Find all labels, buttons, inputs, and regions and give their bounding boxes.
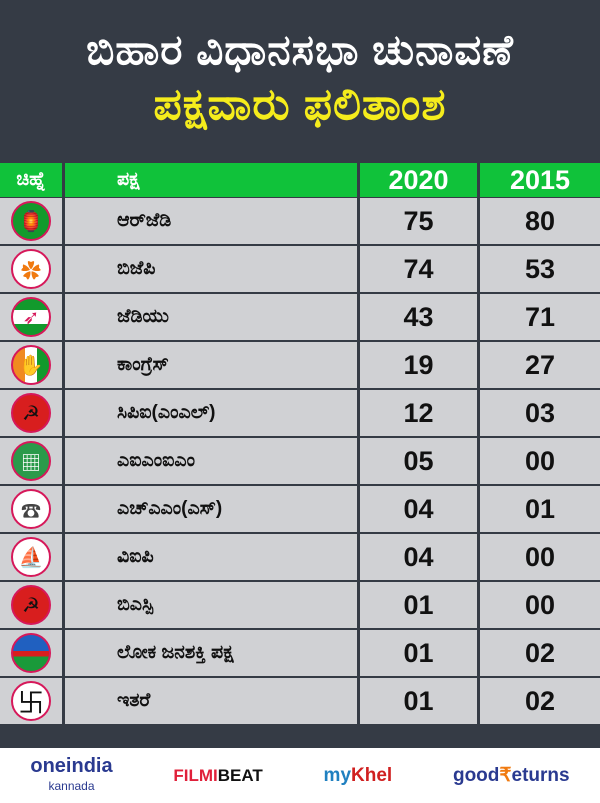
row: BJP: ಬಿಜೆಪಿ [117, 258, 155, 279]
row: BSP: ☭ [22, 594, 40, 616]
row: BJP [0, 246, 600, 292]
header: symbol: ಚಿಹ್ನೆ [16, 169, 46, 190]
logo: filmibeat: FILMIBEAT [173, 766, 263, 784]
row: JDU: ➶ [23, 306, 39, 328]
row: BSP: ಬಿಎಸ್ಪಿ [117, 594, 154, 615]
row: VIP: 00 [525, 542, 555, 572]
title: ಬಿಹಾರ ವಿಧಾನಸಭಾ ಚುನಾವಣೆ [86, 26, 514, 73]
row: Others [0, 678, 600, 724]
header: party [65, 163, 357, 197]
row: AIMIM: ▦ [21, 452, 41, 474]
row: HAM(S): 04 [403, 494, 434, 524]
row: RJD: 75 [403, 206, 434, 236]
row: JDU: ಜೆಡಿಯು [117, 306, 169, 327]
header: 2020 [360, 163, 477, 197]
row: LJP: 02 [525, 638, 555, 668]
row: Congress [0, 342, 600, 388]
row: CPI(ML): 12 [403, 398, 434, 428]
row: BSP: 01 [403, 590, 434, 620]
row: Others: ಇತರೆ [117, 690, 150, 711]
row: VIP: 04 [403, 542, 434, 572]
row: JDU: 71 [525, 302, 555, 332]
row: HAM(S): 01 [525, 494, 555, 524]
header: 2020: 2020 [388, 164, 449, 194]
row: Others: 02 [525, 686, 555, 716]
row: Congress: ಕಾಂಗ್ರೆಸ್ [117, 354, 169, 375]
row: RJD: 80 [525, 206, 555, 236]
subtitle: ಪಕ್ಷವಾರು ಫಲಿತಾಂಶ [153, 80, 446, 129]
row: AIMIM [0, 438, 600, 484]
logo: oneindia: oneindia [30, 754, 113, 776]
row: HAM(S): ☎ [21, 500, 41, 522]
logo: goodreturns: good₹eturns [453, 765, 570, 786]
logo: oneindia: kannada [48, 778, 95, 792]
row: VIP [0, 534, 600, 580]
logo: oneindia [30, 754, 113, 792]
row: Others: 卐 [18, 688, 44, 718]
row: Congress: 19 [403, 350, 434, 380]
row: HAM(S) [0, 486, 600, 532]
row: BJP: ✿ [21, 260, 41, 282]
footer logos [0, 748, 600, 803]
row: BSP: 00 [525, 590, 555, 620]
row: RJD: ಆರ್‌ಜೆಡಿ [117, 210, 171, 231]
row: LJP: ಲೋಕ ಜನಶಕ್ತಿ ಪಕ್ಷ [117, 642, 234, 663]
row: Congress: ✋ [19, 354, 43, 376]
table [0, 163, 600, 724]
row: CPI(ML): ಸಿಪಿಐ(ಎಂಎಲ್) [117, 402, 216, 423]
row: VIP: ⛵ [19, 546, 43, 568]
header: 2015: 2015 [510, 164, 570, 194]
row: RJD [0, 198, 600, 244]
row: CPI(ML) [0, 390, 600, 436]
row: BJP: 74 [403, 254, 434, 284]
header: 2015 [480, 163, 600, 197]
row: AIMIM: 00 [525, 446, 555, 476]
row: BSP [0, 582, 600, 628]
row: AIMIM: 05 [403, 446, 434, 476]
row: HAM(S): ಎಚ್‌ಎಎಂ(ಎಸ್) [117, 498, 222, 519]
row: LJP: 01 [403, 638, 434, 668]
header: party: ಪಕ್ಷ [117, 169, 139, 190]
row: JDU [0, 294, 600, 340]
row: AIMIM: ಎಐಎಂಐಎಂ [117, 450, 195, 471]
header: symbol [0, 163, 62, 197]
logo: mykhel: myKhel [324, 764, 392, 786]
row: CPI(ML): ☭ [22, 402, 40, 424]
row: VIP: ವಿಐಪಿ [117, 546, 154, 567]
row: Others: 01 [403, 686, 434, 716]
row: LJP [0, 630, 600, 676]
row: RJD: 🏮 [19, 210, 43, 232]
row: JDU: 43 [403, 302, 434, 332]
row: CPI(ML): 03 [525, 398, 555, 428]
row: BJP: 53 [525, 254, 555, 284]
row: Congress: 27 [525, 350, 555, 380]
